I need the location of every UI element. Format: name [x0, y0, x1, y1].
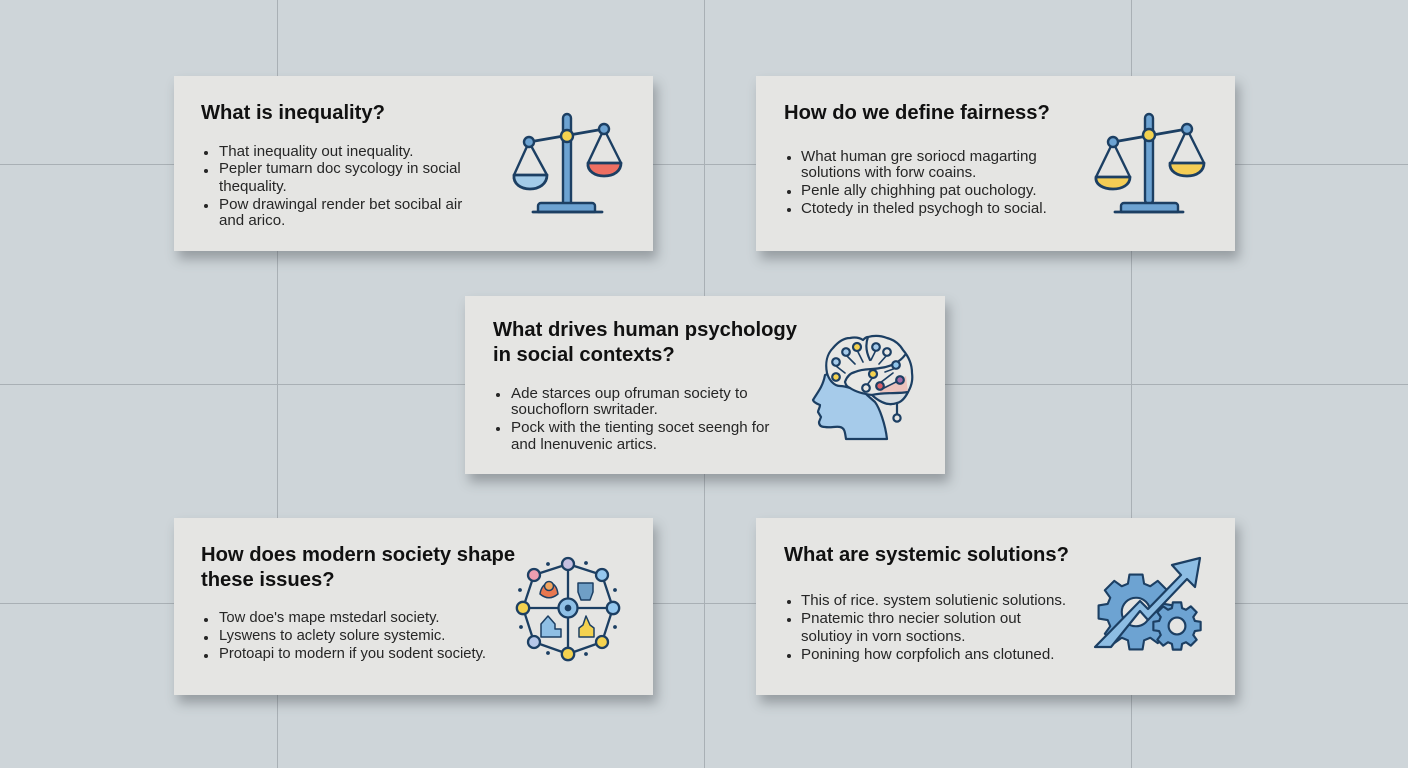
- bullet list: psychology: and lnenuvenic artics.: [511, 436, 657, 453]
- panel: systemic solutions: [756, 518, 1235, 695]
- bullet list: psychology: Ade starces oup ofruman society to: [511, 385, 748, 402]
- bullet list: solutions: [787, 592, 1066, 663]
- bullet list: modern society: [204, 610, 486, 662]
- bullet list: psychology: souchoflorn swritader.: [511, 401, 658, 418]
- bullet list: inequality: and arico.: [219, 212, 285, 229]
- heading: modern society: these issues?: [201, 569, 335, 591]
- bullet list: fairness: solutions with forw coains.: [801, 164, 976, 181]
- bullet list: inequality: thequality.: [219, 178, 287, 195]
- heading: define fairness: How do we define fairness?: [784, 102, 1050, 124]
- bullet list: inequality: Pow drawingal render bet socibal air: [219, 196, 462, 213]
- panel: human psychology: [465, 296, 945, 474]
- icon: society network: [516, 556, 620, 662]
- icon: balance scale yellow: [1094, 112, 1206, 214]
- bullet list: modern society: Tow doe's mape mstedarl society.: [219, 610, 440, 626]
- icon: balance scale red and blue: [512, 112, 622, 214]
- icon: head with brain network: [812, 334, 914, 440]
- heading: human psychology: What drives human psychology: [493, 319, 797, 341]
- bullet list: psychology: [496, 385, 770, 453]
- bullet list: solutions: solutioy in vorn soctions.: [801, 628, 965, 645]
- bullet list: modern society: Protoapi to modern if you sodent society.: [219, 646, 486, 662]
- heading: human psychology: [493, 319, 797, 366]
- heading: modern society: How does modern society shape: [201, 544, 515, 566]
- panel: how do we define fairness: [756, 76, 1235, 251]
- panel: what is inequality: [174, 76, 653, 251]
- bullet list: fairness: Penle ally chighhing pat ouchology.: [801, 182, 1037, 199]
- heading: modern society: [201, 544, 515, 591]
- bullet list: fairness: Ctotedy in theled psychogh to social.: [801, 200, 1047, 217]
- bullet list: solutions: Pnatemic thro necier solution out: [801, 610, 1021, 627]
- icon: gears with rising arrow: [1094, 556, 1202, 651]
- bullet list: solutions: This of rice. system solutienic solutions.: [801, 592, 1066, 609]
- bullet list: fairness: What human gre soriocd magarting: [801, 148, 1037, 165]
- heading: human psychology: in social contexts?: [493, 344, 675, 366]
- bullet list: inequality: Pepler tumarn doc sycology in social: [219, 161, 461, 177]
- heading: systemic solutions: What are systemic solutions?: [784, 544, 1069, 566]
- heading: what is inequality: What is inequality?: [201, 102, 385, 124]
- panel: modern society: [174, 518, 653, 695]
- bullet list: psychology: Pock with the tienting socet seengh for: [511, 419, 769, 436]
- bullet list: inequality: [204, 143, 462, 229]
- bullet list: fairness: [787, 148, 1047, 217]
- bullet list: inequality: That inequality out inequality.: [219, 143, 413, 160]
- bullet list: solutions: Ponining how corpfolich ans clotuned.: [801, 646, 1054, 663]
- bullet list: modern society: Lyswens to aclety solure systemic.: [219, 628, 445, 644]
